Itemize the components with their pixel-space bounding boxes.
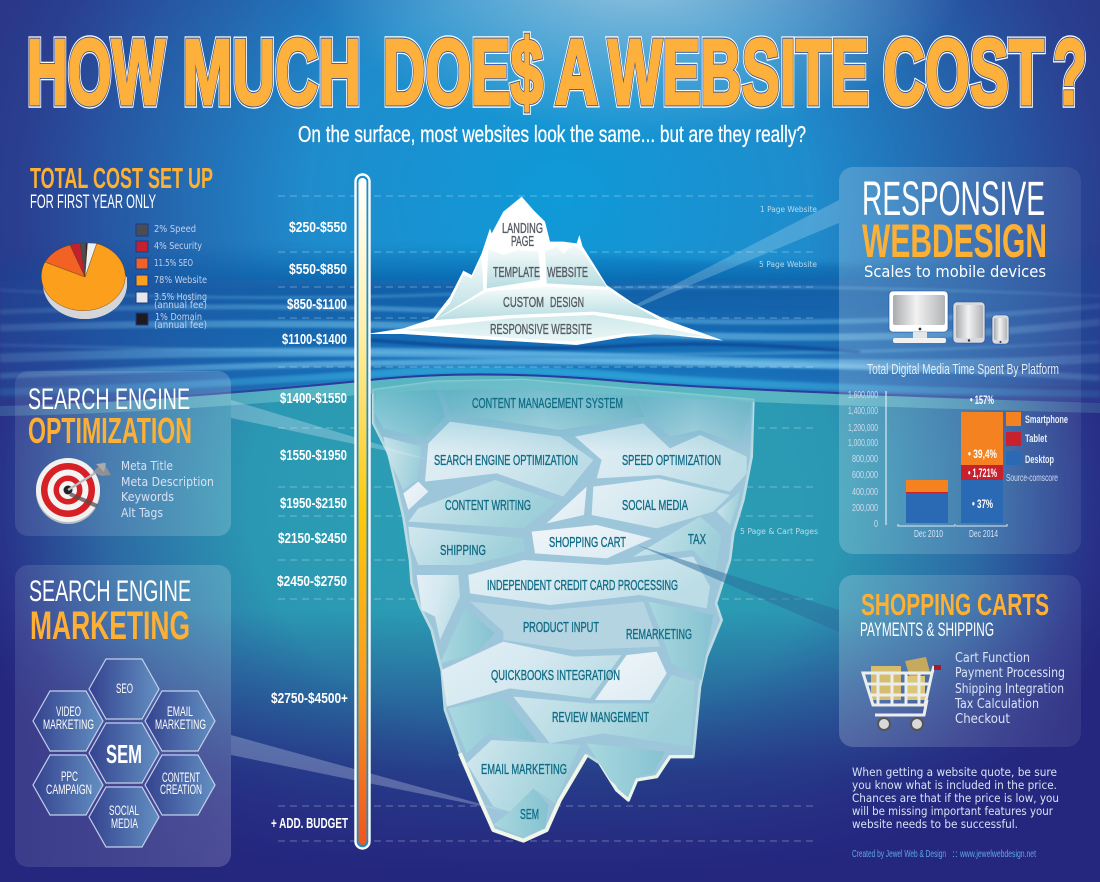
title: MUCH [183, 20, 361, 124]
price labels: $550-$850 [289, 261, 347, 278]
iceberg below the water [370, 377, 757, 841]
heading: optimization: OPTIMIZATION [28, 410, 192, 451]
iceberg underwater labels: SOCIAL MEDIA [622, 498, 688, 514]
beam: shopping carts panel to iceberg [637, 545, 839, 632]
price labels: + ADD. BUDGET [271, 815, 348, 832]
page count notes: 5 Page & Cart Pages [740, 527, 818, 536]
advice paragraph: will be missing important features your [852, 804, 1053, 818]
iceberg tip labels [490, 221, 592, 338]
panel: total cost set up [30, 163, 213, 331]
credit line: :: [952, 848, 958, 860]
title: DOE$ [383, 20, 543, 124]
iceberg underwater labels: SEM [520, 807, 539, 823]
heading: marketing: MARKETING [30, 604, 190, 648]
iceberg underwater labels: SEARCH ENGINE OPTIMIZATION [434, 453, 578, 469]
iceberg above the water [367, 197, 723, 345]
title: WEBSITE [608, 20, 869, 124]
heading: total cost: TOTAL COST SET UP [30, 163, 213, 195]
hexagon diagram: SOCIAL [109, 803, 139, 818]
hexagon diagram [33, 659, 215, 847]
price labels: $1100-$1400 [282, 331, 347, 348]
hexagon diagram: EMAIL [167, 704, 193, 719]
stacked bar chart: Dec 2010 [914, 528, 943, 540]
pie legend [136, 224, 207, 331]
heading: search engine: SEARCH ENGINE [29, 575, 191, 608]
stacked bar chart: 400,000 [852, 486, 878, 498]
stacked bar chart: 1,600,000 [848, 389, 878, 401]
panel: search engine marketing [15, 565, 231, 867]
thermometer price scale [356, 174, 370, 848]
page count notes: 1 Page Website [760, 205, 817, 214]
hexagon diagram: MARKETING [43, 717, 94, 732]
iceberg underwater labels: EMAIL MARKETING [481, 762, 567, 778]
subheading: scales: Scales to mobile devices [864, 262, 1046, 281]
list: cart items: Tax Calculation [954, 697, 1039, 712]
pie legend: 11.5% SEO [154, 258, 193, 269]
list: SEO items: Alt Tags [121, 505, 163, 520]
price labels: $2150-$2450 [278, 530, 347, 547]
iceberg underwater labels: PRODUCT INPUT [523, 620, 599, 636]
pie legend: 3.5% Hosting [154, 292, 207, 303]
pie legend: 1% Domain [155, 312, 202, 323]
panel: shopping carts [839, 575, 1081, 747]
stacked bar chart: Desktop [1025, 454, 1054, 466]
title: MUCH [183, 20, 361, 124]
hexagon diagram: SEO [116, 681, 133, 696]
hexagon diagram: CAMPAIGN [46, 782, 92, 797]
icon: monitor tablet phone [889, 291, 1009, 344]
page count notes: 5 Page Website [759, 260, 817, 269]
list: cart items: Cart Function [955, 651, 1030, 666]
stacked bar chart: 1,200,000 [848, 422, 878, 434]
iceberg tip labels: CUSTOM [503, 295, 544, 311]
list: cart items: Checkout [955, 712, 1010, 727]
pie legend: 2% Speed [154, 224, 196, 235]
pie legend: (annual fee) [154, 320, 207, 331]
subheading: payments: PAYMENTS & SHIPPING [860, 620, 994, 641]
pie chart [41, 243, 127, 319]
title: DOE$ [383, 20, 543, 124]
advice paragraph: When getting a website quote, be sure [852, 765, 1057, 779]
title: A [555, 20, 598, 124]
stacked bar chart: 600,000 [852, 469, 878, 481]
stacked bar chart: Dec 2014 [969, 528, 998, 540]
price labels: $2450-$2750 [277, 573, 347, 590]
stacked bar chart: Smartphone [1025, 414, 1068, 426]
iceberg underwater labels: SHIPPING [440, 543, 486, 559]
list: SEO items: Keywords [121, 489, 174, 504]
iceberg tip labels: WEBSITE [547, 265, 588, 281]
advice paragraph: Chances are that if the price is low, you [852, 791, 1059, 805]
pie legend: (annual fee) [154, 300, 207, 311]
iceberg underwater labels: INDEPENDENT CREDIT CARD PROCESSING [487, 578, 678, 594]
title: HOW [27, 20, 165, 124]
stacked bar chart: • 1,721% [968, 468, 997, 480]
iceberg tip labels: RESPONSIVE WEBSITE [490, 322, 592, 338]
iceberg tip labels: PAGE [511, 234, 534, 250]
stacked bar chart: 1,000,000 [848, 437, 878, 449]
hexagon diagram: VIDEO [56, 704, 81, 719]
title: WEBSITE [608, 20, 869, 124]
stacked bar chart: 1,400,000 [848, 405, 878, 417]
iceberg underwater labels: CONTENT WRITING [445, 498, 531, 514]
iceberg underwater labels: QUICKBOOKS INTEGRATION [491, 668, 620, 684]
beam: responsive panel to iceberg [600, 200, 839, 323]
price labels: $1550-$1950 [280, 447, 347, 464]
advice paragraph: website needs to be successful. [852, 817, 1018, 831]
price labels: $850-$1100 [287, 296, 347, 313]
hexagon diagram: CREATION [160, 782, 202, 797]
stacked bar chart: Source-comscore [1006, 473, 1058, 484]
iceberg underwater labels: REMARKETING [626, 627, 692, 643]
list: cart items: Shipping Integration [955, 682, 1064, 697]
title: DOE$ [383, 20, 543, 124]
advice paragraph: you know what is included in the price. [852, 778, 1057, 792]
price labels: $2750-$4500+ [271, 690, 348, 707]
iceberg underwater labels: REVIEW MANGEMENT [552, 710, 649, 726]
water line [0, 374, 1100, 416]
iceberg underwater labels [434, 396, 721, 823]
title: HOW [27, 20, 165, 124]
price labels: $1400-$1550 [280, 390, 347, 407]
waves on the water surface [0, 245, 1100, 398]
iceberg tip labels: LANDING [502, 221, 543, 237]
heading: search engine: SEARCH ENGINE [28, 383, 190, 416]
hexagon diagram: CONTENT [162, 770, 200, 785]
iceberg tip labels: TEMPLATE [493, 265, 540, 281]
hexagon diagram: MARKETING [155, 717, 206, 732]
iceberg underwater labels: SPEED OPTIMIZATION [622, 453, 721, 469]
stacked bar chart: 200,000 [852, 502, 878, 514]
list: SEO items: Meta Description [121, 474, 214, 489]
hexagon diagram: MEDIA [111, 816, 138, 831]
hexagon diagram: SEM [106, 739, 142, 769]
credit line: Created by Jewel Web & Design [852, 848, 946, 860]
iceberg tip labels: DESIGN [550, 295, 584, 311]
stacked bar chart: Tablet [1025, 433, 1047, 445]
stacked bar chart [848, 389, 1068, 540]
price labels [271, 219, 348, 832]
list: cart items [954, 651, 1065, 727]
list: cart items: Payment Processing [955, 666, 1065, 681]
title: HOW [27, 20, 165, 124]
list: SEO items [121, 458, 214, 520]
iceberg underwater labels: TAX [688, 532, 706, 548]
stacked bar chart: 0 [874, 518, 878, 530]
pie legend: 4% Security [154, 241, 202, 252]
pie legend: 78% Website [154, 275, 207, 286]
price labels: $250-$550 [289, 219, 347, 236]
title: MUCH [183, 20, 361, 124]
title [27, 20, 1087, 124]
advice paragraph [852, 765, 1059, 831]
panel: search engine optimization [15, 371, 231, 536]
title: WEBSITE [608, 20, 869, 124]
list: SEO items: Meta Title [121, 458, 173, 473]
hexagon diagram: PPC [61, 769, 78, 784]
price labels: $1950-$2150 [280, 495, 347, 512]
iceberg underwater labels: SHOPPING CART [549, 535, 626, 551]
panel: responsive webdesign [839, 167, 1081, 554]
dashed price guide lines [278, 196, 818, 841]
stacked bar chart: • 39,4% [968, 449, 997, 461]
stacked bar chart: 800,000 [852, 453, 878, 465]
icon: target with dart [36, 458, 111, 524]
page count notes [740, 205, 818, 536]
stacked bar chart: • 157% [970, 395, 994, 407]
title: A [555, 20, 598, 124]
beam: SEM panel to iceberg [231, 735, 510, 812]
icon: shopping cart [863, 657, 941, 730]
stacked bar chart: • 37% [972, 499, 993, 511]
subheading: first year: FOR FIRST YEAR ONLY [30, 192, 156, 213]
iceberg underwater labels: CONTENT MANAGEMENT SYSTEM [472, 396, 623, 412]
beam: SEO panel to iceberg [231, 400, 430, 460]
subtitle: On the surface, most websites look the same... but are they really? [298, 121, 806, 147]
credit line: www.jewelwebdesign.net [959, 848, 1036, 860]
title: A [555, 20, 598, 124]
